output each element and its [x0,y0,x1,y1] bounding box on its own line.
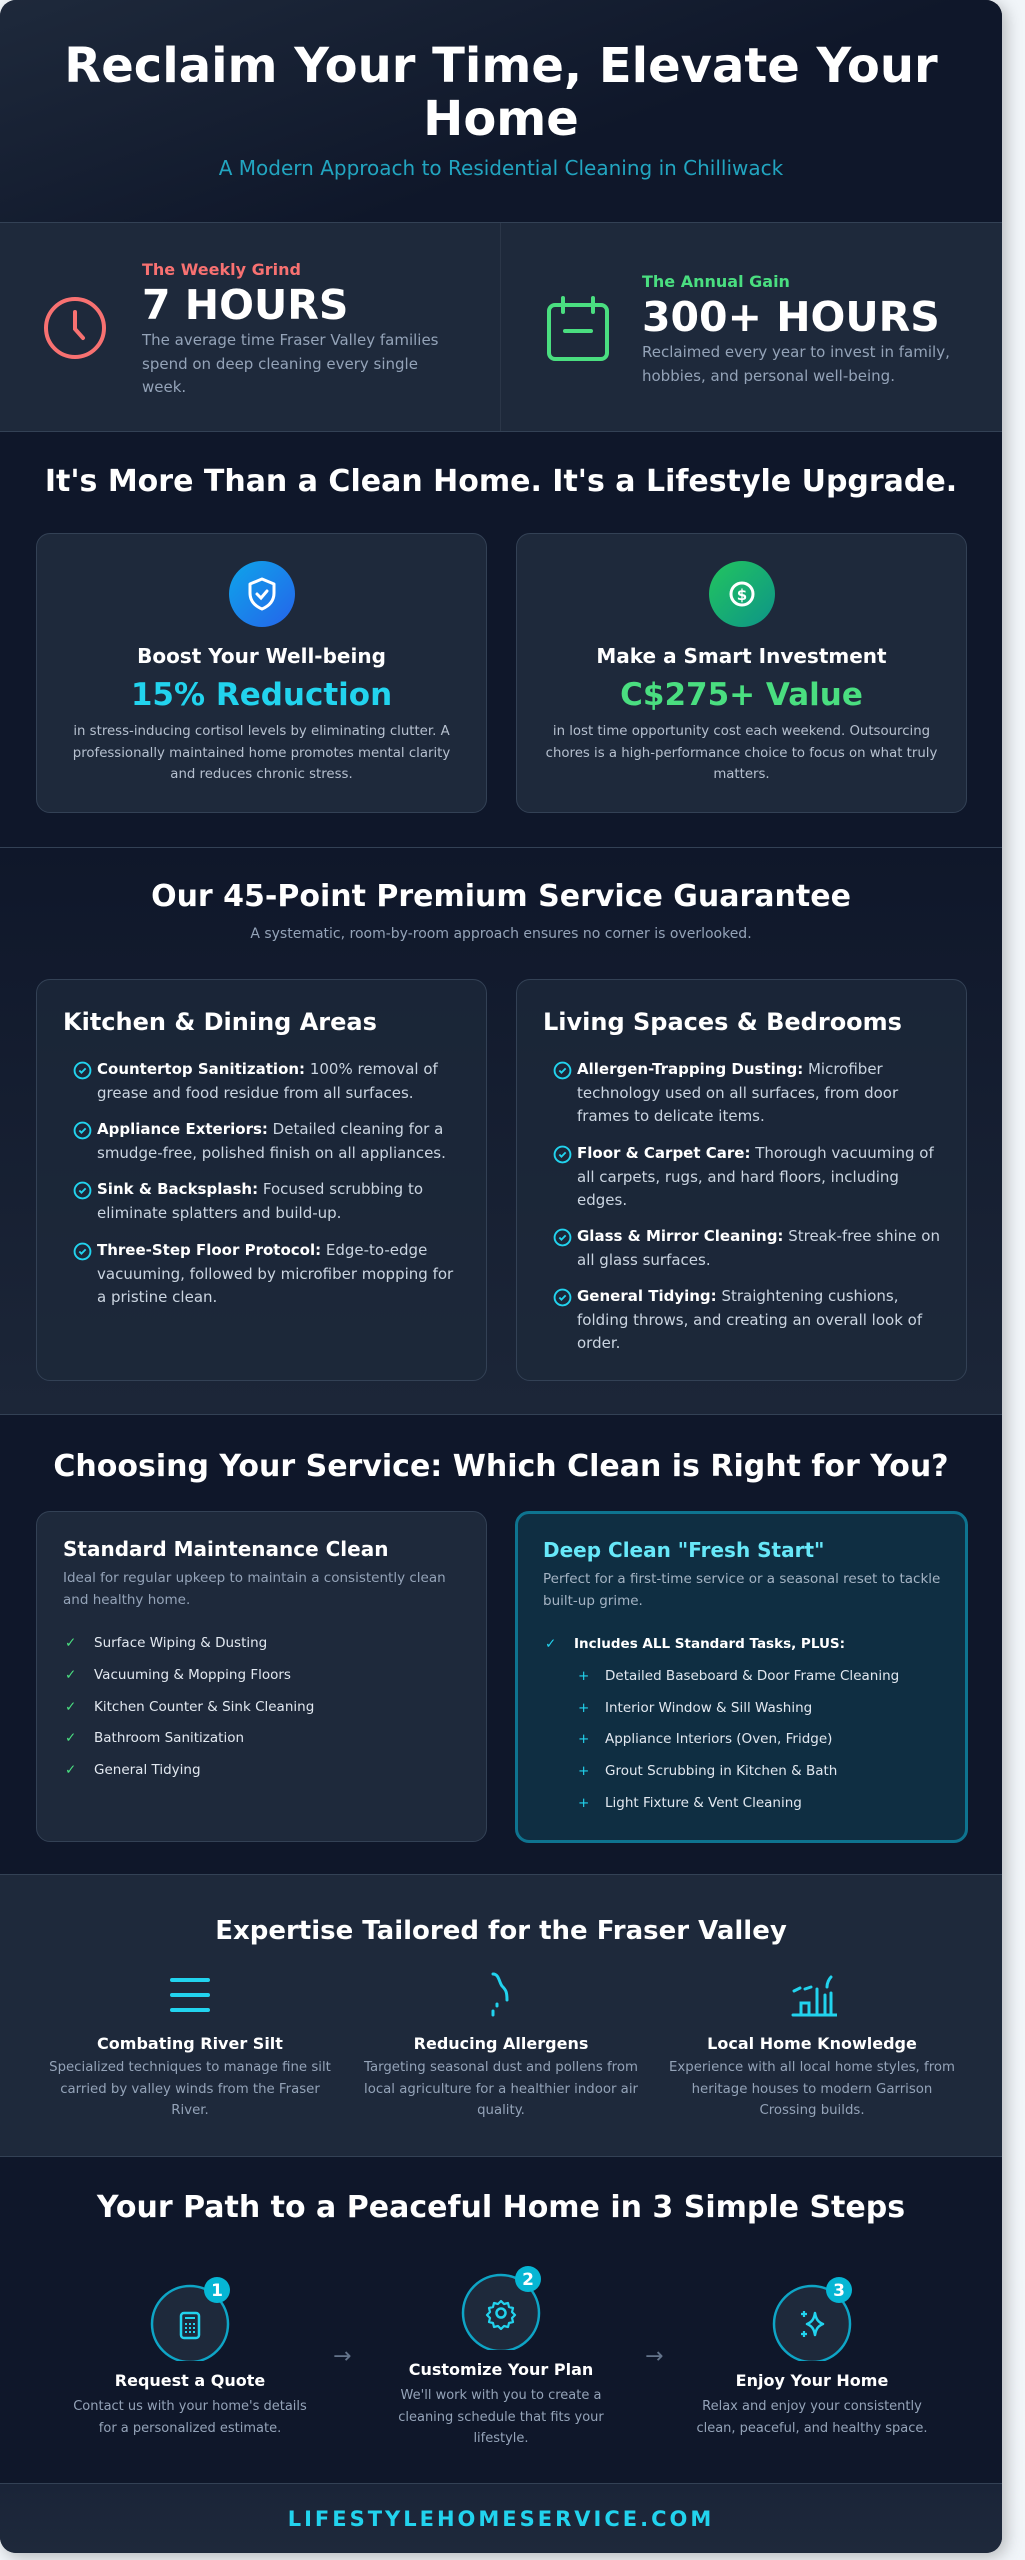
weekly text: The Weekly Grind [142,260,301,279]
list [545,1636,899,1811]
list: ✓ [545,1636,556,1652]
column: river silt [49,1978,331,2118]
stats row [0,222,1002,432]
card: well-being: 15% Reduction [131,677,392,713]
list [65,1635,314,1778]
annual text: 300+ HOURS [642,293,940,341]
section: expertise [0,1875,1002,2157]
weekly text: The average time Fraser Valley families spend on deep cleaning every single week. [142,331,438,396]
list: + [578,1700,589,1716]
list: ✓ [65,1667,76,1683]
item: Sink & Backsplash: Focused scrubbing to eliminate splatters and build-up. [97,1180,423,1222]
list: Vacuuming & Mopping Floors [94,1667,291,1683]
section: choosing service [0,1415,1002,1875]
heading: Your Path to a Peaceful Home in 3 Simple Steps [97,2190,905,2225]
card: living: Living Spaces & Bedrooms [543,1008,902,1036]
icon: gear circle [462,2266,541,2350]
card: investment [516,533,967,813]
column: river silt: Combating River Silt [97,2034,283,2053]
step 2 [398,2266,604,2446]
column: local knowledge: Local Home Knowledge [707,2034,917,2053]
step 1 [73,2277,307,2436]
icon: dollar [709,561,775,627]
weekly text [142,260,438,396]
column: allergens: Reducing Allergens [414,2034,588,2053]
item: Glass & Mirror Cleaning: Streak-free shine on all glass surfaces. [577,1227,940,1268]
card: standard [36,1511,487,1842]
card: well-being [36,533,487,813]
step 2: We'll work with you to create a cleaning schedule that fits your lifestyle. [398,2388,604,2446]
icon: gear circle: 2 [522,2270,534,2290]
annual text: The Annual Gain [642,272,790,291]
heading: It's More Than a Clean Home. It's a Lifestyle Upgrade. [45,464,957,499]
stat: annual gain [547,272,950,384]
icon: dollar: $ [737,586,747,604]
icon: calculator circle [150,2277,230,2361]
weekly text: 7 HOURS [142,281,348,329]
card: investment: Make a Smart Investment [596,644,887,668]
icon: clock [44,297,106,359]
icon: buildings [792,1975,837,2016]
list: ✓ [65,1730,76,1746]
column: allergens: Targeting seasonal dust and pollens from local agriculture for a healthier indoor air quality. [364,2060,638,2118]
column: river silt: Specialized techniques to manage fine silt carried by valley winds from the Fraser River. [49,2060,331,2118]
heading: Our 45-Point Premium Service Guarantee [151,879,851,914]
list: + [578,1795,589,1811]
item: Countertop Sanitization: 100% removal of grease and food residue from all surfaces. [97,1060,438,1102]
card: well-being: Boost Your Well-being [137,644,386,668]
icon: sparkle circle: 3 [833,2281,845,2301]
annual text [642,272,950,384]
card: deep clean: Deep Clean "Fresh Start" [543,1538,824,1562]
step 1: Request a Quote [115,2371,265,2390]
list: Kitchen Counter & Sink Cleaning [94,1699,314,1715]
column: local knowledge [669,1975,955,2118]
arrow: → [333,2344,351,2369]
step 3: Relax and enjoy your consistently [702,2399,922,2414]
list: Interior Window & Sill Washing [605,1700,812,1716]
header [0,0,1002,222]
heading: Choosing Your Service: Which Clean is Right for You? [53,1449,949,1484]
list: Bathroom Sanitization [94,1730,244,1746]
section: lifestyle [0,432,1002,848]
card: kitchen: Kitchen & Dining Areas [63,1008,377,1036]
step 3: clean, peaceful, and healthy space. [696,2420,928,2436]
list: General Tidying [94,1762,201,1778]
arrow: → [645,2344,663,2369]
icon: sparkle circle [772,2277,852,2361]
list: + [578,1763,589,1779]
subtitle: A Modern Approach to Residential Cleaning in Chilliwack [219,156,783,180]
step 2: Customize Your Plan [409,2360,593,2379]
list: Surface Wiping & Dusting [94,1635,267,1651]
item: Floor & Carpet Care: Thorough vacuuming of all carpets, rugs, and hard floors, including edges. [577,1144,934,1209]
list: Light Fixture & Vent Cleaning [605,1795,802,1811]
card: investment: in lost time opportunity cost each weekend. Outsourcing chores is a high-performance choice to focus on what truly matters. [546,724,937,782]
list: Includes ALL Standard Tasks, PLUS: [574,1636,845,1652]
section: steps [0,2157,1002,2484]
item: Allergen-Trapping Dusting: Microfiber technology used on all surfaces, from door frames to delicate items. [577,1060,898,1125]
annual text: Reclaimed every year to invest in family, hobbies, and personal well-being. [642,343,950,384]
icon: lines [170,1978,210,2012]
card: standard: Ideal for regular upkeep to maintain a consistently clean and healthy home. [63,1570,446,1608]
title: Reclaim Your Time, Elevate Your Home [64,38,938,147]
section: guarantee [0,848,1002,1415]
step 3: Enjoy Your Home [736,2371,888,2390]
subheading: A systematic, room-by-room approach ensures no corner is overlooked. [250,926,752,942]
card: deep clean [515,1511,968,1843]
item: Appliance Exteriors: Detailed cleaning for a smudge-free, polished finish on all appliances. [97,1120,446,1162]
step 1: Contact us with your home's details [73,2399,307,2414]
stat: weekly grind [0,223,501,431]
step 1: for a personalized estimate. [99,2420,281,2436]
list: Grout Scrubbing in Kitchen & Bath [605,1763,837,1779]
card: living [516,979,967,1381]
column: allergens [364,1972,638,2118]
card: deep clean: Perfect for a first-time service or a seasonal reset to tackle built-up grime. [543,1571,940,1608]
list: + [578,1731,589,1747]
item: Three-Step Floor Protocol: Edge-to-edge vacuuming, followed by microfiber mopping for a pristine clean. [97,1241,453,1306]
icon: calendar [547,296,609,361]
heading: Expertise Tailored for the Fraser Valley [215,1916,787,1946]
footer [0,2484,1002,2553]
icon: pollen [492,1972,508,2016]
item: General Tidying: Straightening cushions, folding throws, and creating an overall look of order. [577,1287,922,1352]
list: Detailed Baseboard & Door Frame Cleaning [605,1668,899,1684]
list: ✓ [65,1635,76,1651]
card: standard: Standard Maintenance Clean [63,1537,388,1561]
list: ✓ [65,1762,76,1778]
icon: shield [229,561,295,627]
step 3 [696,2277,928,2436]
list: Appliance Interiors (Oven, Fridge) [605,1731,832,1747]
footer url: LIFESTYLEHOMESERVICE.COM [288,2507,714,2531]
icon: calculator circle: 1 [211,2281,223,2301]
card: well-being: in stress-inducing cortisol levels by eliminating clutter. A professionally maintained home promotes mental clarity and reduces chronic stress. [73,724,450,782]
card: investment: C$275+ Value [620,677,863,713]
card: kitchen [36,979,487,1381]
column: local knowledge: Experience with all local home styles, from heritage houses to modern Garrison Crossing builds. [669,2060,955,2118]
list: ✓ [65,1699,76,1715]
list: + [578,1668,589,1684]
